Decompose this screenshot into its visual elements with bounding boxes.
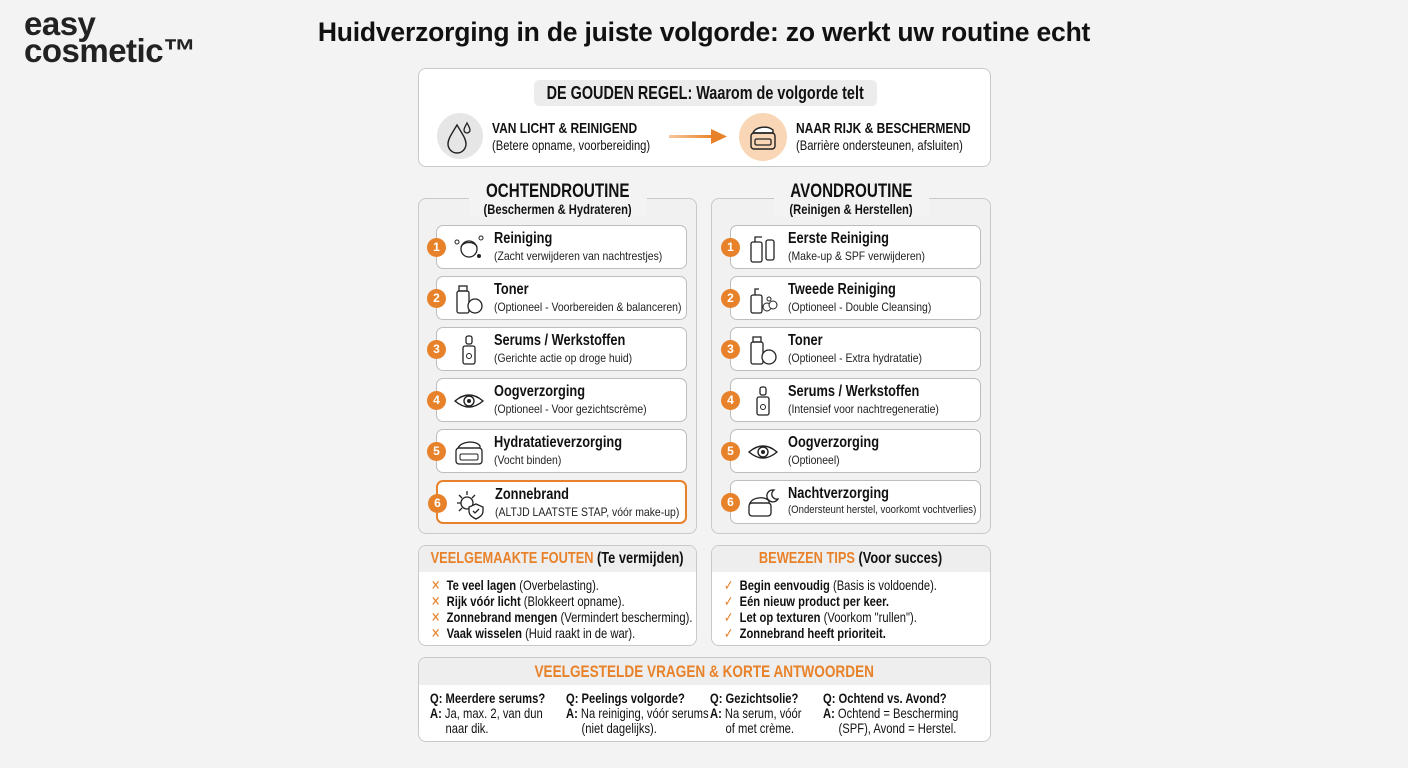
icon: cream jar bbox=[739, 113, 787, 161]
step 3 bbox=[730, 327, 981, 371]
step 2: Toner bbox=[494, 281, 529, 298]
step 4: Oogverzorging bbox=[494, 383, 585, 400]
evening heading: (Reinigen & Herstellen) bbox=[790, 201, 913, 217]
step 5: 5 bbox=[433, 444, 440, 458]
FAQ 4: Q: Ochtend vs. Avond? bbox=[823, 690, 947, 706]
step 6 bbox=[730, 480, 981, 524]
FAQ 1 bbox=[430, 690, 545, 736]
step 1 bbox=[436, 225, 687, 269]
FAQ 2: Q: Peelings volgorde? bbox=[566, 690, 685, 706]
step 6: Nachtverzorging bbox=[788, 485, 889, 502]
step 5: (Vocht binden) bbox=[494, 453, 561, 467]
morning heading: OCHTENDROUTINE bbox=[486, 181, 630, 202]
step 5 bbox=[730, 429, 981, 473]
morning heading: (Beschermen & Hydrateren) bbox=[484, 201, 632, 217]
panel: morning routine bbox=[418, 198, 697, 534]
step 4 bbox=[436, 378, 687, 422]
text: from light bbox=[492, 120, 650, 153]
logo: cosmetic™ bbox=[24, 32, 196, 69]
text: from light: (Betere opname, voorbereiding) bbox=[492, 137, 650, 153]
step 3: Serums / Werkstoffen bbox=[494, 332, 625, 349]
step 6 highlighted bbox=[436, 480, 687, 524]
text: to rich bbox=[796, 120, 971, 153]
step 3: 3 bbox=[433, 342, 440, 356]
FAQ 1: naar dik. bbox=[446, 720, 489, 736]
tips heading bbox=[712, 546, 990, 572]
FAQ 3 bbox=[710, 690, 802, 736]
step 6: (Ondersteunt herstel, voorkomt vochtverlies) bbox=[788, 504, 976, 516]
FAQ 2: (niet dagelijks). bbox=[582, 720, 657, 736]
panel: common mistakes bbox=[418, 545, 697, 646]
mistakes heading: VEELGEMAAKTE FOUTEN (Te vermijden) bbox=[431, 550, 684, 567]
step 3: (Gerichte actie op droge huid) bbox=[494, 351, 632, 365]
FAQ 4: A: Ochtend = Bescherming bbox=[823, 705, 958, 721]
mistakes heading bbox=[419, 546, 696, 572]
step 3: 3 bbox=[727, 342, 734, 356]
golden rule label: DE GOUDEN REGEL: Waarom de volgorde telt bbox=[547, 83, 864, 103]
step 1 bbox=[730, 225, 981, 269]
tips heading: BEWEZEN TIPS (Voor succes) bbox=[759, 550, 943, 567]
evening heading: AVONDROUTINE bbox=[790, 181, 913, 202]
step 3: (Optioneel - Extra hydratatie) bbox=[788, 351, 922, 365]
step 3: Toner bbox=[788, 332, 823, 349]
step 5: (Optioneel) bbox=[788, 453, 840, 467]
FAQ 3: A: Na serum, vóór bbox=[710, 705, 802, 721]
step 2: 2 bbox=[727, 291, 734, 305]
FAQ 1: A: Ja, max. 2, van dun bbox=[430, 705, 543, 721]
step 4 bbox=[730, 378, 981, 422]
step 6 highlighted: (ALTJD LAATSTE STAP, vóór make-up) bbox=[495, 505, 679, 519]
step 5: Oogverzorging bbox=[788, 434, 879, 451]
step 6 highlighted: 6 bbox=[434, 496, 441, 510]
arrow bbox=[669, 129, 727, 144]
FAQ 1: Q: Meerdere serums? bbox=[430, 690, 545, 706]
FAQ 4: (SPF), Avond = Herstel. bbox=[839, 720, 956, 736]
panel: proven tips bbox=[711, 545, 991, 646]
logo bbox=[24, 5, 196, 69]
logo: easy bbox=[24, 5, 95, 42]
step 5: 5 bbox=[727, 444, 734, 458]
mistakes list bbox=[431, 577, 692, 641]
step 1: (Zacht verwijderen van nachtrestjes) bbox=[494, 249, 662, 263]
FAQ 3: Q: Gezichtsolie? bbox=[710, 690, 798, 706]
step 2: (Optioneel - Voorbereiden & balanceren) bbox=[494, 300, 681, 314]
icon: water drop bbox=[437, 113, 483, 159]
FAQ heading: VEELGESTELDE VRAGEN & KORTE ANTWOORDEN bbox=[535, 662, 874, 681]
FAQ 4 bbox=[823, 690, 958, 736]
step 1: 1 bbox=[727, 240, 734, 254]
mistakes list: ✕ Te veel lagen (Overbelasting). bbox=[431, 577, 599, 593]
step 5 bbox=[436, 429, 687, 473]
panel: FAQ bbox=[418, 657, 991, 742]
tips list: ✓ Begin eenvoudig (Basis is voldoende). bbox=[724, 577, 937, 593]
FAQ heading bbox=[419, 658, 990, 685]
step 4: 4 bbox=[433, 393, 440, 407]
step 6 highlighted: Zonnebrand bbox=[495, 486, 569, 503]
FAQ 2 bbox=[566, 690, 709, 736]
panel: evening routine bbox=[711, 198, 991, 534]
step 4: (Optioneel - Voor gezichtscrème) bbox=[494, 402, 647, 416]
step 1: 1 bbox=[433, 240, 440, 254]
step 2 bbox=[730, 276, 981, 320]
FAQ 2: A: Na reiniging, vóór serums bbox=[566, 705, 709, 721]
panel: golden rule bbox=[418, 68, 991, 167]
step 6: 6 bbox=[727, 495, 734, 509]
text: to rich: NAAR RIJK & BESCHERMEND bbox=[796, 120, 971, 137]
title: Huidverzorging in de juiste volgorde: zo werkt uw routine echt bbox=[318, 17, 1090, 47]
mistakes list: ✕ Rijk vóór licht (Blokkeert opname). bbox=[431, 593, 625, 609]
mistakes list: ✕ Vaak wisselen (Huid raakt in de war). bbox=[431, 625, 635, 641]
step 3 bbox=[436, 327, 687, 371]
tips list: ✓ Eén nieuw product per keer. bbox=[724, 593, 889, 609]
step 1: Reiniging bbox=[494, 230, 552, 247]
tips list: ✓ Zonnebrand heeft prioriteit. bbox=[724, 625, 886, 641]
step 2: (Optioneel - Double Cleansing) bbox=[788, 300, 931, 314]
step 4: Serums / Werkstoffen bbox=[788, 383, 919, 400]
text: to rich: (Barrière ondersteunen, afsluiten) bbox=[796, 137, 963, 153]
step 2: 2 bbox=[433, 291, 440, 305]
step 4: 4 bbox=[727, 393, 734, 407]
step 1: (Make-up & SPF verwijderen) bbox=[788, 249, 925, 263]
step 1: Eerste Reiniging bbox=[788, 230, 889, 247]
step 4: (Intensief voor nachtregeneratie) bbox=[788, 402, 939, 416]
morning heading bbox=[469, 181, 647, 217]
step 5: Hydratatieverzorging bbox=[494, 434, 622, 451]
evening heading bbox=[774, 181, 929, 217]
step 2: Tweede Reiniging bbox=[788, 281, 896, 298]
tips list bbox=[724, 577, 937, 641]
mistakes list: ✕ Zonnebrand mengen (Vermindert bescherming). bbox=[431, 609, 692, 625]
tips list: ✓ Let op texturen (Voorkom "rullen"). bbox=[724, 609, 917, 625]
FAQ 3: of met crème. bbox=[726, 720, 794, 736]
step 2 bbox=[436, 276, 687, 320]
text: from light: VAN LICHT & REINIGEND bbox=[492, 120, 637, 137]
